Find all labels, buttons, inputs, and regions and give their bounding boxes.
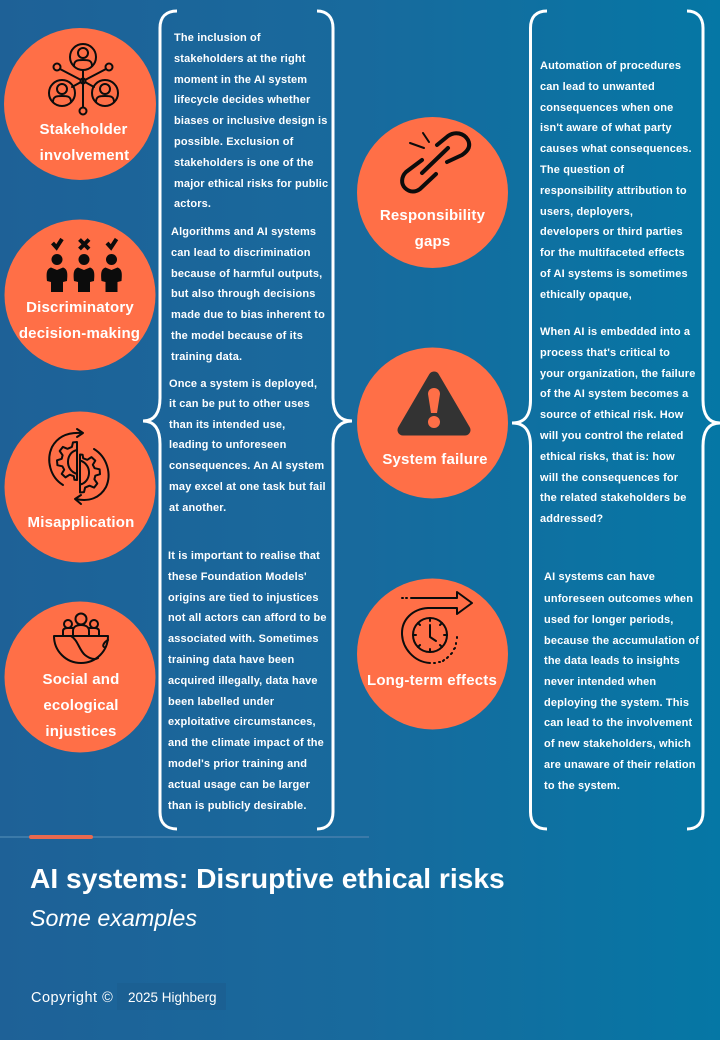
- text block: misapplication: at another.: [169, 502, 226, 514]
- label: Misapplication: [28, 514, 134, 531]
- text block: long-term: AI systems can have: [544, 571, 655, 583]
- text block: injustices: acquired illegally, data have: [168, 675, 318, 687]
- icon: stakeholder network: [49, 44, 118, 114]
- label: [19, 299, 140, 342]
- text block: system failure: will you control the related: [539, 430, 684, 442]
- text block: injustices: these Foundation Models': [168, 571, 307, 583]
- text block: long-term: to the system.: [544, 780, 620, 792]
- text block: injustices: not all actors can afford to be: [168, 612, 327, 624]
- footer rule with accent: [0, 835, 369, 839]
- label: involvement: [40, 147, 129, 164]
- text block: long-term: unforeseen outcomes when: [544, 593, 693, 605]
- text block: responsibility: of AI systems is sometimes: [540, 268, 688, 280]
- text block: discrimination: training data.: [171, 351, 242, 363]
- label: [380, 207, 486, 250]
- text block: discrimination: the model because of its: [171, 330, 303, 342]
- label: ecological: [43, 697, 119, 714]
- text block: misapplication: [169, 378, 326, 514]
- text block: responsibility: The question of: [540, 164, 624, 176]
- text block: discrimination: can lead to discrimination: [171, 247, 311, 259]
- text block: discrimination: but also through decisions: [171, 288, 315, 300]
- text block: system failure: [539, 326, 695, 525]
- text block: stakeholders: moment in the AI system: [174, 74, 307, 86]
- text block: stakeholders: biases or inclusive design is: [174, 115, 328, 127]
- panel: system failure: [357, 348, 508, 498]
- label: Discriminatory: [26, 299, 134, 316]
- text block: misapplication: consequences. An AI system: [169, 460, 324, 472]
- text block: long-term: the data leads to insights: [544, 655, 680, 667]
- text block: system failure: addressed?: [540, 513, 603, 525]
- text block: stakeholders: stakeholders at the right: [174, 53, 306, 65]
- text block: stakeholders: major ethical risks for public: [174, 178, 328, 190]
- text block: injustices: [168, 550, 327, 812]
- text block: system failure: process that's critical to: [540, 347, 670, 359]
- icon: clock with arrow: [402, 592, 472, 663]
- text block: injustices: exploitative circumstances,: [168, 716, 316, 728]
- panel: long-term effects: [357, 578, 508, 730]
- bracket: right text column: [512, 11, 720, 829]
- text block: responsibility: [540, 60, 692, 301]
- text block: injustices: been labelled under: [168, 696, 275, 708]
- text block: responsibility: Automation of procedures: [540, 60, 681, 72]
- text block: long-term: are unaware of their relation: [544, 759, 696, 771]
- text block: discrimination: because of harmful outputs,: [171, 268, 322, 280]
- label: Stakeholder: [39, 121, 128, 138]
- text block: injustices: training data have been: [168, 654, 294, 666]
- text block: injustices: and the climate impact of the: [168, 737, 324, 749]
- text block: stakeholders: lifecycle decides whether: [174, 94, 311, 106]
- label: decision-making: [19, 325, 140, 342]
- text block: misapplication: than its intended use,: [169, 419, 285, 431]
- label: [39, 121, 129, 164]
- text block: long-term: because the accumulation of: [544, 635, 699, 647]
- text block: misapplication: Once a system is deployed,: [169, 378, 317, 390]
- text block: stakeholders: stakeholders is one of the: [174, 157, 314, 169]
- text block: system failure: will the consequences for: [539, 472, 679, 484]
- text block: misapplication: it can be put to other uses: [169, 398, 310, 410]
- text block: responsibility: users, deployers,: [540, 206, 633, 218]
- text block: stakeholders: [174, 32, 328, 210]
- title: AI systems: Disruptive ethical risks: [30, 862, 505, 894]
- text block: system failure: source of ethical risk. How: [540, 409, 684, 421]
- copyright: Copyright ©: [31, 990, 113, 1006]
- subtitle: Some examples: [30, 905, 197, 931]
- text block: responsibility: causes what consequences.: [540, 143, 692, 155]
- text block: injustices: model's prior training and: [168, 758, 307, 770]
- icon: three people with marks: [47, 239, 122, 292]
- label: injustices: [45, 723, 117, 740]
- icon: people on globe bowl: [54, 614, 108, 663]
- text block: responsibility: responsibility attribution to: [540, 185, 687, 197]
- text block: long-term: used for longer periods,: [544, 614, 674, 626]
- text block: discrimination: Algorithms and AI systems: [171, 226, 316, 238]
- label: Responsibility: [380, 207, 486, 224]
- text block: system failure: of the AI system becomes a: [540, 388, 689, 400]
- text block: injustices: It is important to realise that: [168, 550, 320, 562]
- text block: discrimination: [171, 226, 325, 363]
- label: System failure: [382, 451, 488, 468]
- label: gaps: [415, 233, 450, 250]
- text block: system failure: the related stakeholders be: [540, 492, 686, 504]
- text block: misapplication: leading to unforeseen: [169, 439, 287, 451]
- text block: system failure: ethical risks, that is: how: [540, 451, 675, 463]
- text block: stakeholders: actors.: [174, 198, 211, 210]
- text block: long-term: [544, 571, 699, 792]
- bracket: left text column: [143, 11, 352, 829]
- text block: misapplication: may excel at one task but fail: [169, 481, 326, 493]
- label: Social and: [42, 671, 120, 688]
- text block: injustices: actual usage can be larger: [168, 779, 311, 791]
- text block: stakeholders: The inclusion of: [174, 32, 261, 44]
- text block: responsibility: for the multifaceted effects: [540, 247, 685, 259]
- text block: long-term: of new stakeholders, which: [544, 738, 691, 750]
- label: Long-term effects: [367, 672, 497, 689]
- icon: gears with cycle arrows: [49, 429, 109, 504]
- text block: injustices: than is publicly desirable.: [168, 800, 307, 812]
- text block: long-term: can lead to the involvement: [544, 717, 692, 729]
- text block: injustices: origins are tied to injustices: [168, 592, 319, 604]
- text block: responsibility: developers or third parties: [540, 226, 683, 238]
- panel: responsibility gaps: [357, 117, 508, 268]
- text block: long-term: deploying the system. This: [544, 697, 689, 709]
- panel: social and ecological injustices: [4, 602, 156, 752]
- text block: responsibility: can lead to unwanted: [540, 81, 655, 93]
- icon: warning triangle: [403, 377, 465, 430]
- text block: responsibility: ethically opaque,: [540, 289, 632, 301]
- text block: stakeholders: possible. Exclusion of: [174, 136, 294, 148]
- panel: misapplication: [4, 412, 156, 562]
- text block: injustices: associated with. Sometimes: [168, 633, 319, 645]
- text block: discrimination: made due to bias inherent to: [171, 309, 325, 321]
- text block: responsibility: isn't aware of what party: [540, 122, 672, 134]
- text block: long-term: never intended when: [544, 676, 656, 688]
- panel: discriminatory decision-making: [4, 220, 156, 370]
- text block: system failure: When AI is embedded into a: [540, 326, 691, 338]
- text block: system failure: your organization, the failure: [540, 368, 695, 380]
- panel: stakeholder involvement: [4, 28, 156, 180]
- label: [42, 671, 120, 740]
- text block: responsibility: consequences when one: [540, 102, 673, 114]
- copyright: [31, 983, 226, 1010]
- copyright: 2025 Highberg: [128, 990, 217, 1005]
- icon: broken chain link: [402, 133, 469, 192]
